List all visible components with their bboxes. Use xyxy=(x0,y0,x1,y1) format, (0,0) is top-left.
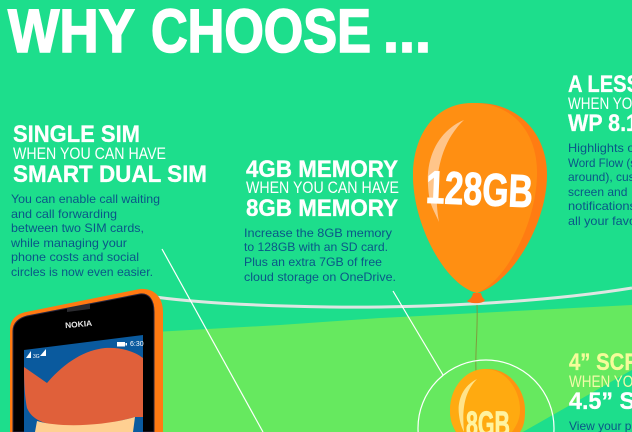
text block: memory: 8GB MEMORY xyxy=(246,195,398,222)
text block: single SIM: and call forwarding xyxy=(11,207,117,221)
balloon body xyxy=(450,369,520,432)
screen xyxy=(24,335,143,432)
balloon highlight xyxy=(459,379,477,432)
text block: single SIM: SMART DUAL SIM xyxy=(13,161,207,188)
phone front xyxy=(13,294,154,432)
status bar xyxy=(26,341,144,360)
text block: single SIM xyxy=(10,121,207,279)
text block: memory: Increase the 8GB memory xyxy=(244,226,392,240)
text block: single SIM: You can enable call waiting xyxy=(11,192,160,206)
teal corner wedge xyxy=(523,370,632,432)
text block: memory: WHEN YOU CAN HAVE xyxy=(246,179,399,197)
status bar: 3G xyxy=(33,354,40,360)
text block: memory: 4GB MEMORY xyxy=(246,156,398,183)
text block: single SIM: circles is now even easier. xyxy=(11,265,153,279)
text block: single SIM: SINGLE SIM xyxy=(13,121,140,148)
callout circle xyxy=(418,360,554,432)
balloon body shade xyxy=(413,103,547,293)
text block: memory: to 128GB with an SD card. xyxy=(244,240,388,254)
text block: screen size xyxy=(569,349,632,432)
face illustration xyxy=(35,417,135,432)
hair illustration xyxy=(24,348,143,426)
text block: WP 8.1: notifications xyxy=(568,199,632,213)
balloon string xyxy=(476,305,477,372)
title xyxy=(8,0,431,65)
text block: single SIM: while managing your xyxy=(10,236,127,250)
balloon shade xyxy=(450,369,525,432)
leader line: memory xyxy=(393,291,443,375)
Nokia logo: NOKIA xyxy=(65,319,93,330)
phone xyxy=(10,289,163,432)
balloon body xyxy=(413,103,537,293)
text block: single SIM: between two SIM cards, xyxy=(11,221,144,235)
large orange balloon: 128GB xyxy=(413,103,547,372)
text block: single SIM: phone costs and social xyxy=(11,250,139,264)
balloon highlight xyxy=(428,120,464,222)
small yellow balloon: 8GB xyxy=(450,369,525,432)
balloon label: 128GB xyxy=(425,161,534,217)
text block: WP 8.1 xyxy=(568,71,632,228)
speaker xyxy=(67,304,90,312)
balloon knot xyxy=(467,293,485,303)
phone shell xyxy=(10,289,163,432)
text block: memory: cloud storage on OneDrive. xyxy=(244,270,396,284)
text block: memory: Plus an extra 7GB of free xyxy=(244,255,382,269)
text block: WP 8.1: screen and xyxy=(568,185,627,199)
lime green lower panel xyxy=(100,305,632,432)
leader line: single SIM xyxy=(162,249,263,432)
status bar: 6:30 xyxy=(130,341,144,348)
text block: memory xyxy=(244,156,399,284)
text block: single SIM: WHEN YOU CAN HAVE xyxy=(13,145,166,163)
text block: WP 8.1: all your favo xyxy=(568,214,632,228)
hanging wire xyxy=(155,288,632,307)
